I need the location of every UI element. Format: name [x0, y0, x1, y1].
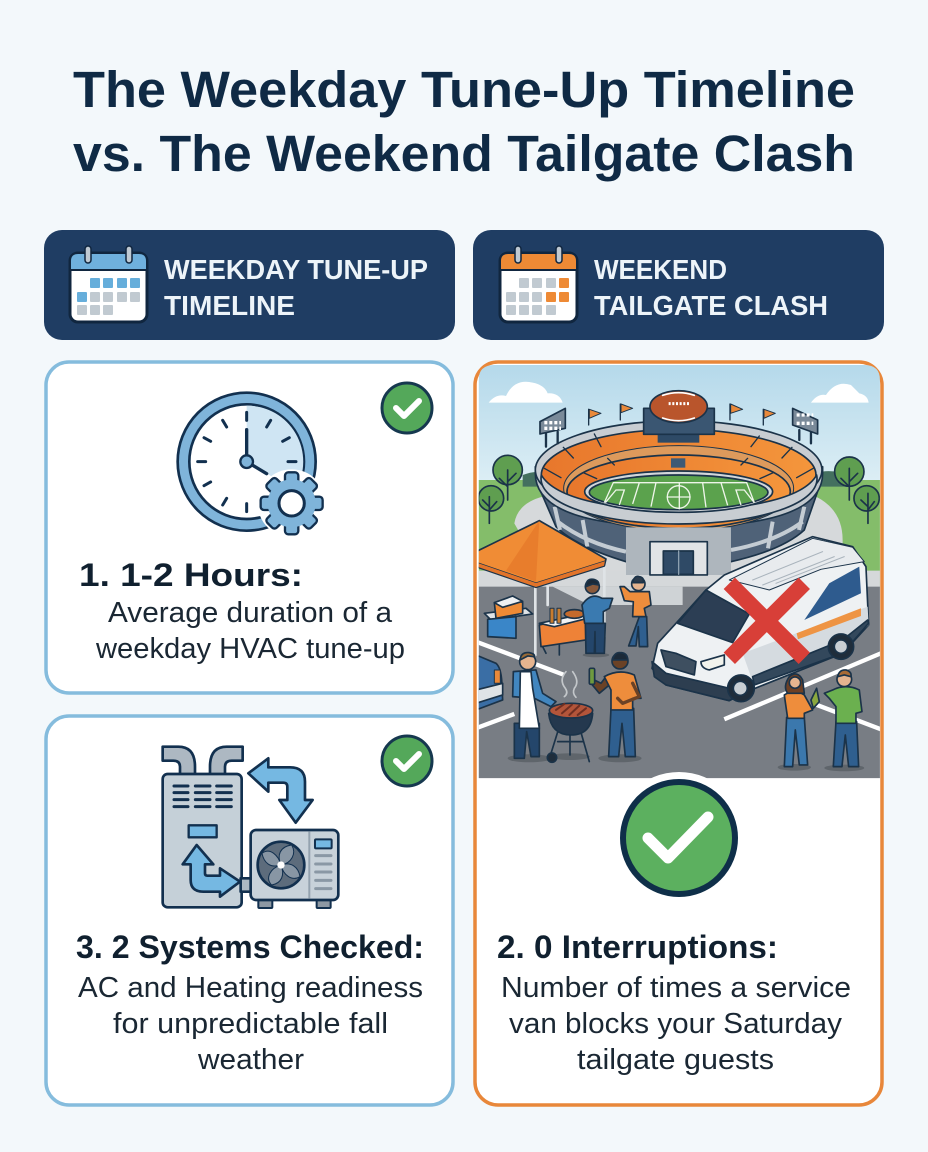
text: 2 systems checked: weather [197, 1044, 304, 1076]
clouds [489, 382, 869, 403]
title [73, 61, 855, 182]
heading: weekend tailgate clash: TAILGATE CLASH [594, 290, 828, 321]
parking lines [476, 642, 881, 729]
text: 0 interruptions: tailgate guests [577, 1044, 774, 1076]
icon: clock with gear [178, 393, 326, 537]
title: The Weekday Tune-Up Timeline [73, 61, 855, 118]
grass [476, 480, 886, 587]
plaza [514, 497, 843, 573]
grill [547, 672, 593, 762]
heading: weekday tune-up timeline: TIMELINE [164, 290, 295, 321]
man with bottle [589, 653, 642, 762]
text: 0 interruptions: Number of times a service [501, 972, 851, 1004]
text: 1-2 hours: 1. 1-2 Hours: [79, 557, 303, 593]
text: 2 systems checked: AC and Heating readiness [78, 972, 423, 1004]
icon: furnace and ac unit [163, 747, 338, 908]
asphalt [476, 587, 886, 780]
text: 2 systems checked: 3. 2 Systems Checked: [76, 929, 424, 965]
icon: blue calendar [70, 246, 147, 322]
scoreboard and football [644, 391, 714, 468]
text: 0 interruptions [497, 929, 851, 1076]
panel: weekday header [44, 230, 455, 340]
text: 1-2 hours: weekday HVAC tune-up [95, 633, 405, 665]
text: 0 interruptions: 2. 0 Interruptions: [497, 929, 778, 965]
panel: 2 systems checked [46, 716, 453, 1105]
icon: green check badge [382, 383, 432, 433]
trees [478, 455, 879, 523]
tent [476, 521, 606, 655]
griller [508, 653, 556, 762]
people near tent [582, 576, 651, 657]
van [652, 537, 869, 702]
stadium entrance [626, 527, 731, 575]
heading: weekend tailgate clash [594, 254, 828, 321]
panel: weekend header [473, 230, 884, 340]
red x [729, 583, 804, 658]
panel: 0 interruptions [475, 360, 886, 1105]
text: 2 systems checked [76, 929, 424, 1076]
title: vs. The Weekend Tailgate Clash [73, 125, 855, 182]
heading: weekend tailgate clash: WEEKEND [594, 254, 727, 285]
text: 1-2 hours [79, 557, 405, 665]
heading: weekday tune-up timeline [164, 254, 428, 321]
cooler and table [484, 595, 585, 656]
text: 0 interruptions: van blocks your Saturday [509, 1008, 842, 1040]
icon: orange calendar [500, 246, 577, 322]
stadium [535, 421, 823, 562]
text: 1-2 hours: Average duration of a [108, 597, 393, 629]
field lines [604, 483, 754, 509]
icon: large green check badge [613, 772, 745, 904]
text: 2 systems checked: for unpredictable fall [113, 1008, 388, 1040]
panel: 1-2 hours [46, 362, 453, 693]
illustration: stadium tailgate scene [476, 360, 886, 780]
pickup truck [476, 655, 503, 710]
icon: green check badge [382, 736, 432, 786]
light towers and flags [540, 404, 818, 447]
couple [778, 670, 864, 771]
heading: weekday tune-up timeline: WEEKDAY TUNE-UP [164, 254, 428, 285]
